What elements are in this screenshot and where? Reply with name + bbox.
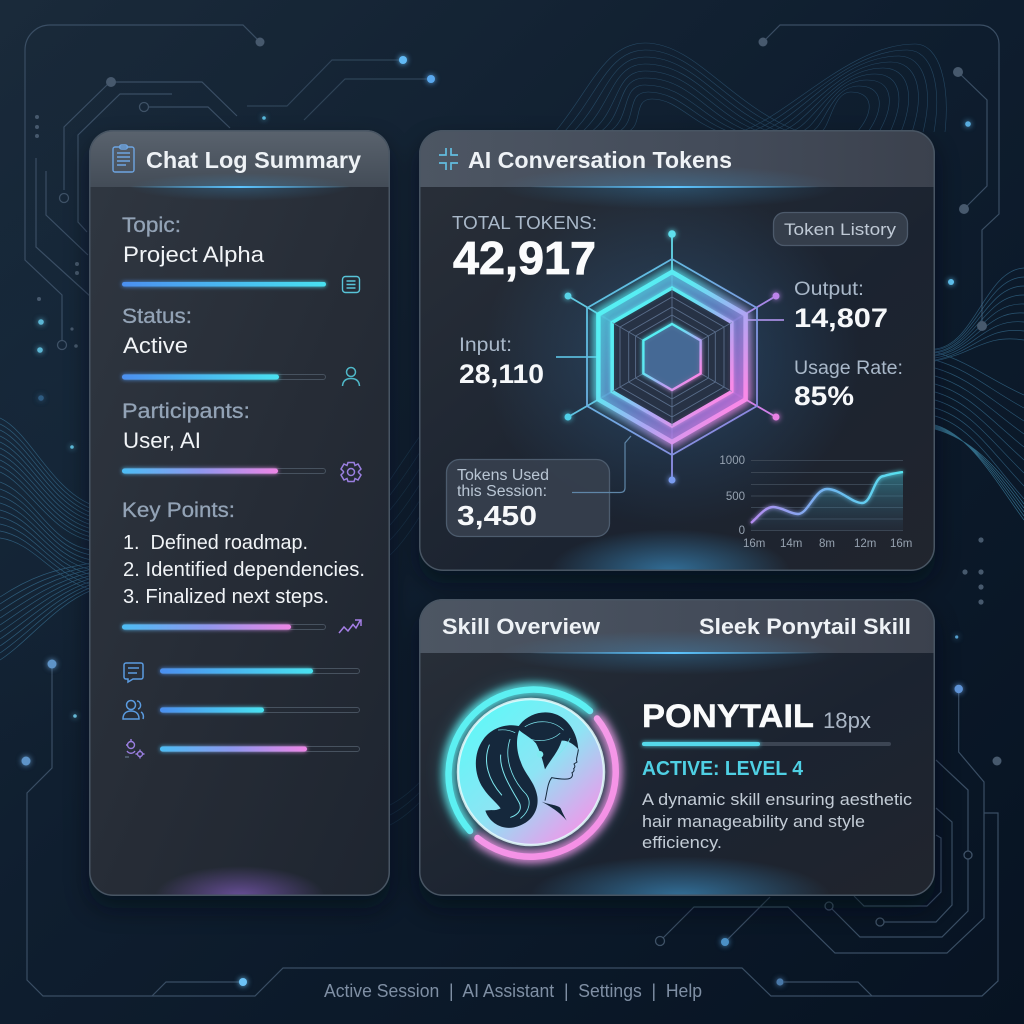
line chart: token history: 14m [780, 538, 802, 550]
topic: Project Alpha [123, 242, 265, 267]
heading: skill overview: Skill Overview [442, 614, 601, 639]
progress bar: people [160, 708, 360, 712]
total tokens: 42,917 [453, 232, 596, 284]
line chart: token history: 1000 [719, 455, 745, 467]
button: token listory [774, 212, 908, 246]
skill title [642, 698, 871, 734]
panel: AI conversation tokens [419, 130, 935, 613]
key points: Key Points: [122, 499, 235, 522]
icon: trend arrow [339, 620, 361, 633]
background wave meshes [0, 268, 1024, 825]
topic: Topic: [122, 214, 181, 237]
heading: AI conversation tokens: AI Conversation Tokens [468, 147, 732, 173]
panel: chat log summary [89, 130, 390, 926]
panel: skill overview [419, 599, 935, 936]
icon: user [342, 368, 360, 386]
line chart: token history: 16m [890, 538, 912, 550]
line chart: token history: 16m [743, 538, 765, 550]
participants: Participants: [122, 400, 250, 423]
input stat: Input: [459, 335, 512, 356]
line chart: token history [719, 455, 912, 550]
button: token listory: Token Listory [784, 220, 897, 239]
input stat [459, 335, 544, 389]
hexagon radar chart [556, 230, 784, 484]
level progress bar [642, 742, 891, 746]
total tokens: TOTAL TOKENS: [452, 212, 597, 233]
participants: User, AI [123, 428, 201, 453]
key points: 2. Identified dependencies. [123, 559, 365, 581]
usage rate stat [794, 358, 903, 411]
icon: document [342, 276, 360, 292]
footer navigation: Active Session | AI Assistant | Settings | Help [324, 981, 702, 1001]
key points: 3. Finalized next steps. [123, 586, 329, 608]
key points: 1. Defined roadmap. [123, 532, 308, 554]
callout: tokens used this session: 3,450 [457, 500, 537, 531]
icon: chat bubble [124, 663, 143, 682]
top-right wave mesh [555, 43, 946, 132]
icon: settings figure [125, 739, 144, 758]
icon: compress corners [439, 148, 458, 170]
skill description [642, 791, 912, 852]
line chart: token history: 0 [739, 525, 745, 537]
skill description: A dynamic skill ensuring aesthetic [642, 791, 912, 809]
line chart: token history: 12m [854, 538, 876, 550]
icon: people [123, 700, 143, 719]
input stat: 28,110 [459, 359, 544, 389]
output stat [794, 279, 888, 333]
topic [122, 214, 326, 286]
usage rate stat: 85% [794, 381, 854, 411]
skill description: hair manageability and style [642, 813, 865, 831]
status: Active [123, 333, 188, 358]
usage rate stat: Usage Rate: [794, 358, 903, 379]
participants [122, 400, 326, 474]
callout: tokens used this session: this Session: [457, 483, 547, 500]
progress bar: chat [160, 668, 360, 674]
line chart: token history: 8m [819, 538, 835, 550]
callout: tokens used this session [446, 436, 631, 536]
status: Status: [122, 305, 192, 328]
callout: tokens used this session: Tokens Used [457, 467, 549, 484]
level label: ACTIVE: LEVEL 4 [642, 758, 804, 780]
heading: sleek ponytail skill: Sleek Ponytail Skill [699, 614, 911, 639]
progress bar: settings [160, 746, 360, 752]
skill title: 18px [823, 708, 871, 733]
icon: clipboard [113, 145, 134, 172]
icon: gear [341, 462, 361, 482]
output stat: Output: [794, 279, 864, 300]
status [122, 305, 326, 380]
line chart: token history: 500 [726, 491, 745, 503]
key points [122, 499, 365, 630]
heading: chat log summary: Chat Log Summary [146, 147, 361, 173]
skill description: efficiency. [642, 834, 722, 852]
skill title: PONYTAIL [642, 698, 814, 734]
output stat: 14,807 [794, 303, 888, 333]
icon: ponytail badge [443, 684, 619, 860]
